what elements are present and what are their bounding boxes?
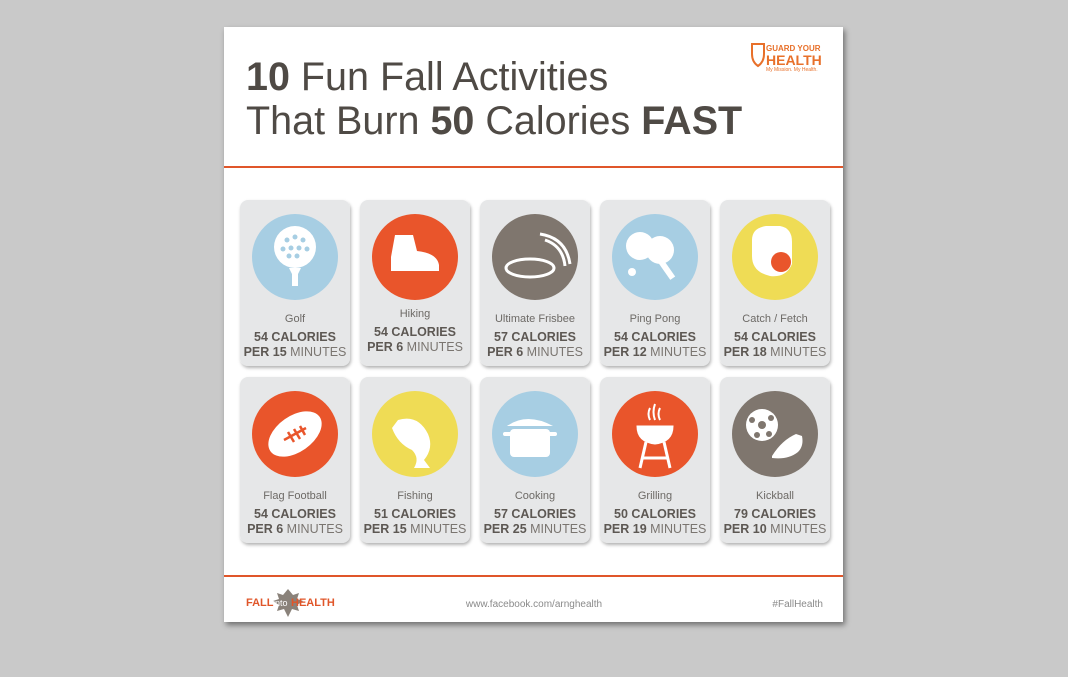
card: Hiking: PER 6 MINUTES (367, 340, 463, 354)
card: Golf (240, 200, 350, 366)
card: Hiking: 54 CALORIES (374, 325, 456, 339)
icon: ball and shoe (746, 409, 802, 458)
card: Ultimate Frisbee: PER 6 MINUTES (487, 345, 583, 359)
footer logo: fall into health: into (273, 598, 288, 608)
footer logo: fall into health: HEALTH (291, 597, 335, 609)
card: Ping Pong: 54 CALORIES (614, 330, 696, 344)
icon: glove (752, 226, 792, 276)
icon: boot (391, 235, 439, 271)
page card (224, 27, 843, 622)
card: Golf: PER 15 MINUTES (244, 345, 346, 359)
title (246, 55, 742, 143)
card: Flag Football: 54 CALORIES (254, 507, 336, 521)
card: Grilling: PER 19 MINUTES (604, 522, 706, 536)
card: Hiking (360, 200, 470, 366)
card: Fishing: 51 CALORIES (374, 507, 456, 521)
card: Ping Pong (600, 200, 710, 366)
card: Golf: 54 CALORIES (254, 330, 336, 344)
logo: guard your health: GUARD YOUR (766, 44, 821, 53)
card: Flag Football: Flag Football (263, 490, 327, 502)
logo: guard your health: HEALTH (766, 52, 822, 68)
card: Golf: Golf (285, 313, 306, 325)
card: Ultimate Frisbee: 57 CALORIES (494, 330, 576, 344)
title: 10 Fun Fall Activities (246, 55, 608, 99)
card: Kickball: Kickball (756, 490, 794, 502)
card: Cooking: PER 25 MINUTES (484, 522, 586, 536)
icon: frisbee (506, 234, 570, 277)
card: Catch / Fetch: 54 CALORIES (734, 330, 816, 344)
card: Fishing: Fishing (397, 490, 433, 502)
card: Kickball: PER 10 MINUTES (724, 522, 826, 536)
icon: fish (392, 419, 430, 468)
card: Fishing: PER 15 MINUTES (364, 522, 466, 536)
card: Catch / Fetch: Catch / Fetch (742, 313, 808, 325)
footer url: www.facebook.com/arnghealth (465, 599, 602, 610)
icon: grill (637, 404, 673, 468)
card: Grilling: Grilling (638, 490, 672, 502)
card: Kickball: 79 CALORIES (734, 507, 816, 521)
icon: football (260, 402, 330, 466)
card: Ultimate Frisbee: Ultimate Frisbee (495, 313, 575, 325)
card: Fishing (360, 377, 470, 543)
card: Catch / Fetch (720, 200, 830, 366)
title: That Burn 50 Calories FAST (246, 99, 742, 143)
card: Flag Football (240, 377, 350, 543)
card: Ping Pong: PER 12 MINUTES (604, 345, 706, 359)
card: Catch / Fetch: PER 18 MINUTES (724, 345, 826, 359)
card: Ping Pong: Ping Pong (630, 313, 680, 325)
icon: pot (503, 419, 557, 457)
card: Ultimate Frisbee (480, 200, 590, 366)
card: Grilling (600, 377, 710, 543)
card: Flag Football: PER 6 MINUTES (247, 522, 343, 536)
card: Hiking: Hiking (400, 308, 430, 320)
logo: guard your health: My Mission. My Health. (766, 67, 818, 73)
card: Cooking: Cooking (515, 490, 555, 502)
footer logo: fall into health: FALL (246, 597, 274, 609)
card: Grilling: 50 CALORIES (614, 507, 696, 521)
card: Kickball (720, 377, 830, 543)
footer hashtag: #FallHealth (772, 599, 823, 610)
footer logo: fall into health (246, 589, 335, 617)
logo: guard your health (752, 44, 822, 73)
card: Cooking: 57 CALORIES (494, 507, 576, 521)
icon: golf ball (274, 226, 316, 286)
card: Cooking (480, 377, 590, 543)
icon: paddles (626, 232, 675, 280)
